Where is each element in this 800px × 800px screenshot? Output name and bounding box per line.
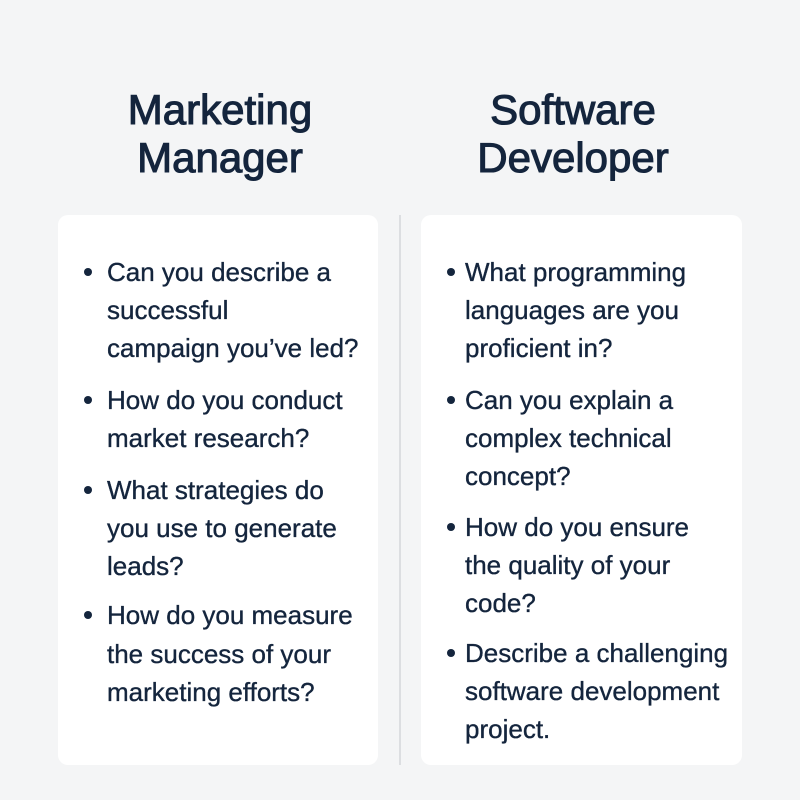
question 2 <box>447 385 674 491</box>
question 4: project. <box>465 714 550 744</box>
title: Marketing Manager: Manager <box>137 134 303 181</box>
question 4: software development <box>465 676 719 706</box>
question 1 <box>84 257 358 363</box>
question 2 <box>84 385 343 453</box>
title: Software Developer <box>477 86 669 181</box>
question 3: code? <box>465 588 536 618</box>
question 1: proficient in? <box>465 333 612 363</box>
question 2: concept? <box>465 461 571 491</box>
question 3: What strategies do <box>107 475 324 505</box>
question 1 <box>447 257 686 363</box>
panel: software developer questions <box>421 215 742 765</box>
question 2: market research? <box>107 423 309 453</box>
title: Software Developer: Developer <box>477 134 669 181</box>
question 1: campaign you’ve led? <box>107 333 358 363</box>
question 4: the success of your <box>107 639 331 669</box>
question 4: Describe a challenging <box>465 638 728 668</box>
title: Marketing Manager: Marketing <box>128 86 312 133</box>
question 4: marketing efforts? <box>107 677 315 707</box>
question 2: How do you conduct <box>107 385 343 415</box>
question 1: successful <box>107 295 228 325</box>
question 4: How do you measure <box>107 600 353 630</box>
question 1: Can you describe a <box>107 257 331 287</box>
question 1: What programming <box>465 257 686 287</box>
question 3: you use to generate <box>107 513 337 543</box>
question 3 <box>447 512 689 618</box>
question 2: Can you explain a <box>465 385 673 415</box>
question 3 <box>84 475 337 581</box>
question 1: languages are you <box>465 295 679 325</box>
question 4 <box>447 638 728 744</box>
question 3: How do you ensure <box>465 512 689 542</box>
question 2: complex technical <box>465 423 672 453</box>
title: Software Developer: Software <box>490 86 656 133</box>
question 3: the quality of your <box>465 550 670 580</box>
question 4 <box>84 600 353 707</box>
question 3: leads? <box>107 551 184 581</box>
title: Marketing Manager <box>128 86 312 181</box>
panel: marketing manager questions <box>58 215 378 765</box>
divider <box>399 215 401 765</box>
